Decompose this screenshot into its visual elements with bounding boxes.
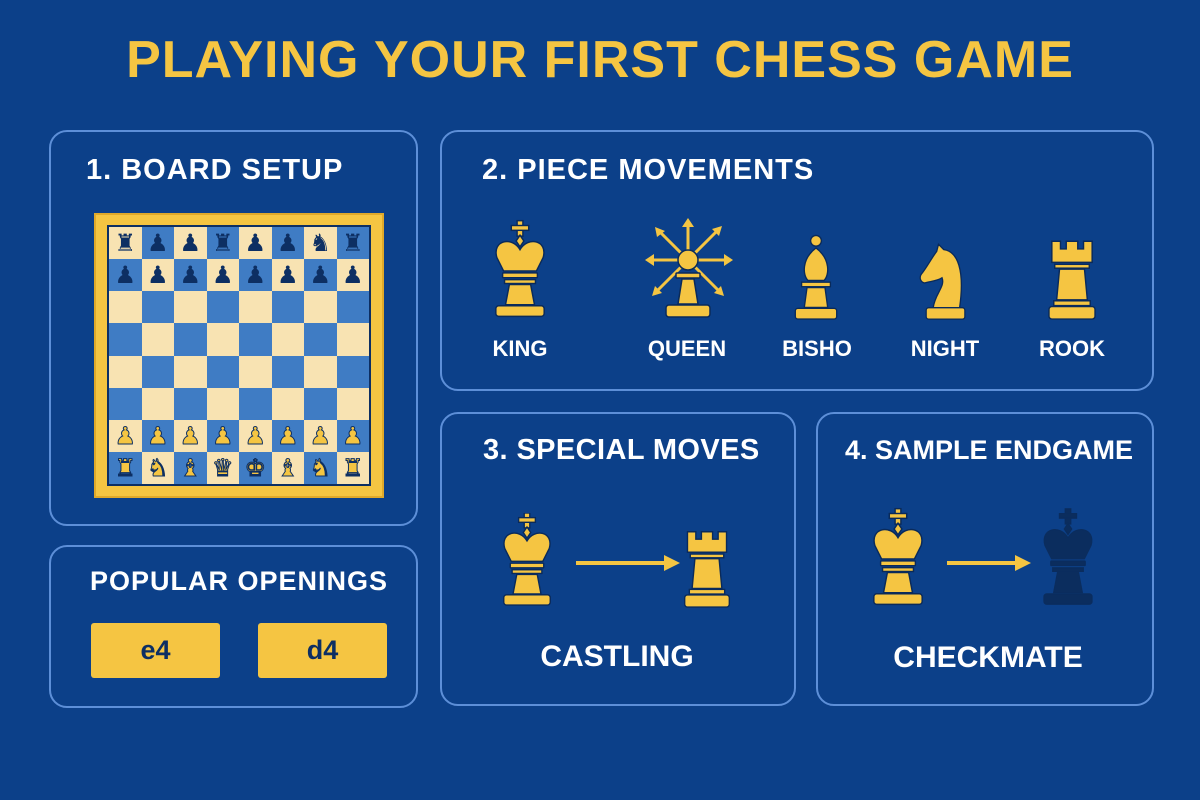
chessboard: ♞ <box>309 229 331 257</box>
label: bishop: BISHO <box>782 336 852 361</box>
chessboard: ♝ <box>179 454 201 482</box>
heading: board setup: 1. BOARD SETUP <box>86 154 343 186</box>
chessboard: ♟ <box>147 229 168 257</box>
chessboard: ♟ <box>244 229 266 257</box>
heading: special moves: 3. SPECIAL MOVES <box>483 434 760 466</box>
chessboard: ♟ <box>212 422 234 450</box>
panel: piece movements <box>440 130 1154 391</box>
chessboard: ♟ <box>309 261 331 289</box>
chessboard: ♟ <box>342 261 364 289</box>
chessboard: ♟ <box>342 422 364 450</box>
chessboard: ♟ <box>244 422 266 450</box>
arrow: endgame <box>947 555 1031 571</box>
panel: popular openings <box>49 545 418 708</box>
label: rook: ROOK <box>1039 336 1105 361</box>
icon: knight <box>920 243 966 320</box>
heading: popular openings: POPULAR OPENINGS <box>90 566 388 596</box>
panel: special moves <box>440 412 796 706</box>
button: e4 <box>91 623 220 678</box>
icon: castling rook <box>684 531 730 608</box>
chessboard: ♟ <box>277 422 298 450</box>
panel: sample endgame <box>816 412 1154 706</box>
chessboard: ♟ <box>277 261 298 289</box>
label: castling: CASTLING <box>540 640 694 673</box>
chessboard: ♟ <box>114 261 136 289</box>
chessboard: ♟ <box>114 422 136 450</box>
chessboard: ♜ <box>342 229 364 257</box>
chessboard: ♜ <box>114 454 136 482</box>
chessboard: ♟ <box>179 229 201 257</box>
button: d4 <box>258 623 387 678</box>
panel: board setup <box>49 130 418 526</box>
chessboard: ♟ <box>179 422 201 450</box>
label: king: KING <box>492 336 548 361</box>
chessboard: ♟ <box>212 261 234 289</box>
chessboard: ♝ <box>277 454 298 482</box>
chessboard: ♜ <box>342 454 364 482</box>
heading: sample endgame: 4. SAMPLE ENDGAME <box>845 435 1133 465</box>
icon: bishop <box>794 234 838 320</box>
chessboard: ♛ <box>212 454 234 482</box>
chessboard: ♜ <box>114 229 136 257</box>
chessboard: ♟ <box>147 261 168 289</box>
button: e4: e4 <box>140 635 171 665</box>
chessboard <box>94 213 384 498</box>
chessboard: ♟ <box>244 261 266 289</box>
chessboard: ♟ <box>277 229 298 257</box>
button: d4: d4 <box>307 635 338 665</box>
chessboard: ♜ <box>212 229 234 257</box>
chessboard: ♟ <box>147 422 168 450</box>
label: checkmate: CHECKMATE <box>893 641 1083 674</box>
chessboard: ♚ <box>244 454 266 482</box>
title: PLAYING YOUR FIRST CHESS GAME <box>126 31 1074 89</box>
chessboard: ♞ <box>309 454 331 482</box>
icon: dark king <box>1043 508 1093 605</box>
icon: queen moves <box>645 218 733 318</box>
label: queen: QUEEN <box>648 336 726 361</box>
arrow: castling <box>576 555 680 571</box>
icon: castling king <box>503 513 551 606</box>
chessboard: ♟ <box>309 422 331 450</box>
heading: piece movements: 2. PIECE MOVEMENTS <box>482 154 814 186</box>
chessboard: ♟ <box>179 261 201 289</box>
icon: white king <box>873 508 923 606</box>
chessboard: ♞ <box>147 454 168 482</box>
icon: rook <box>1048 240 1096 320</box>
icon: king <box>495 220 545 318</box>
label: knight: NIGHT <box>911 336 979 361</box>
